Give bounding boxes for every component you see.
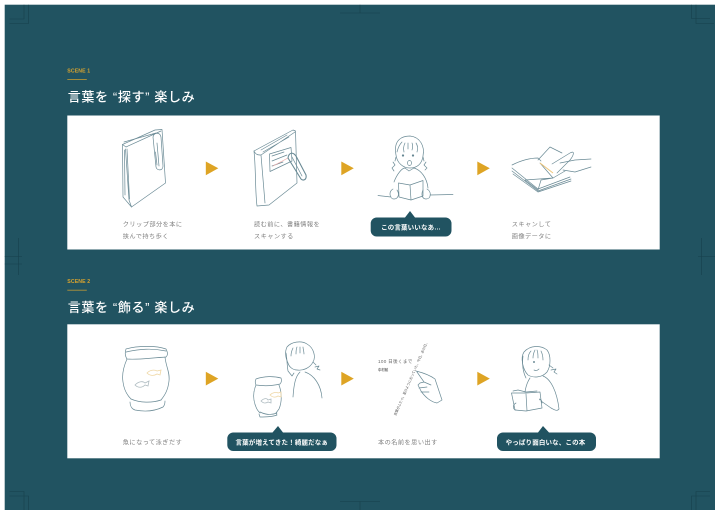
arrow — [206, 162, 218, 175]
caption: step 2: スキャンする — [254, 234, 294, 240]
panel: scene 1 — [67, 116, 660, 250]
speech bubble: step 2 — [227, 426, 336, 451]
fish — [135, 381, 149, 387]
caption: step 4: 画像データに — [512, 232, 552, 240]
caption: step 1: 魚になって泳ぎだす — [123, 438, 182, 446]
caption: step 1: 挟んで持ち歩く — [123, 232, 169, 240]
caption: step 1 — [123, 220, 183, 240]
scene 2 label — [67, 279, 90, 290]
fish — [261, 399, 271, 403]
book title: 100 日後くまで — [378, 358, 413, 365]
caption: step 4: スキャンして — [512, 222, 551, 228]
caption: step 2: 読む前に、書籍情報を — [254, 220, 320, 228]
speech bubble: step 3: この言葉いいなあ… — [381, 222, 441, 231]
caption: step 2 — [254, 220, 320, 240]
arrow — [477, 372, 490, 386]
icon: scanning a book — [254, 130, 306, 206]
speech bubble: step 4: やっぱり面白いな、この本 — [506, 437, 586, 446]
scene 1 heading: 言葉を “探す” 楽しみ — [68, 90, 195, 104]
highlight line — [540, 163, 553, 173]
speech bubble: step 2: 言葉が増えてきた！綺麗だなぁ — [236, 437, 328, 446]
icon: child reading — [378, 136, 453, 200]
icon: child reading a book — [512, 346, 559, 411]
arrow — [206, 372, 218, 386]
arrow — [477, 162, 490, 175]
book title: 中村航 — [378, 367, 389, 372]
icon: open book and hand — [512, 147, 591, 192]
icon: book with clip — [122, 130, 166, 207]
icon: fishbowl — [123, 346, 169, 411]
speech bubble: step 3 — [371, 211, 452, 236]
book title — [378, 358, 413, 372]
scene 2 label: SCENE 2 — [67, 279, 90, 285]
caption: step 4 — [512, 222, 552, 240]
icon: small fishbowl and child — [254, 342, 322, 417]
panel: scene 2 — [67, 324, 660, 458]
speech bubble: step 4 — [497, 426, 596, 451]
scene 1 label — [67, 68, 90, 80]
arrow — [341, 162, 354, 175]
fish — [147, 370, 161, 375]
caption: step 1: クリップ部分を本に — [123, 220, 183, 228]
scene 2 heading: 言葉を “飾る” 楽しみ — [68, 300, 195, 315]
fish — [270, 392, 281, 397]
scene 1 label: SCENE 1 — [67, 68, 90, 74]
icon: diagonal sentence: 言葉がふたつ、星のように光っていた、今日。あの日、 — [392, 340, 429, 416]
icon: pointing hand — [416, 371, 442, 403]
caption: step 3: 本の名前を思い出す — [378, 438, 438, 446]
arrow — [341, 372, 354, 386]
